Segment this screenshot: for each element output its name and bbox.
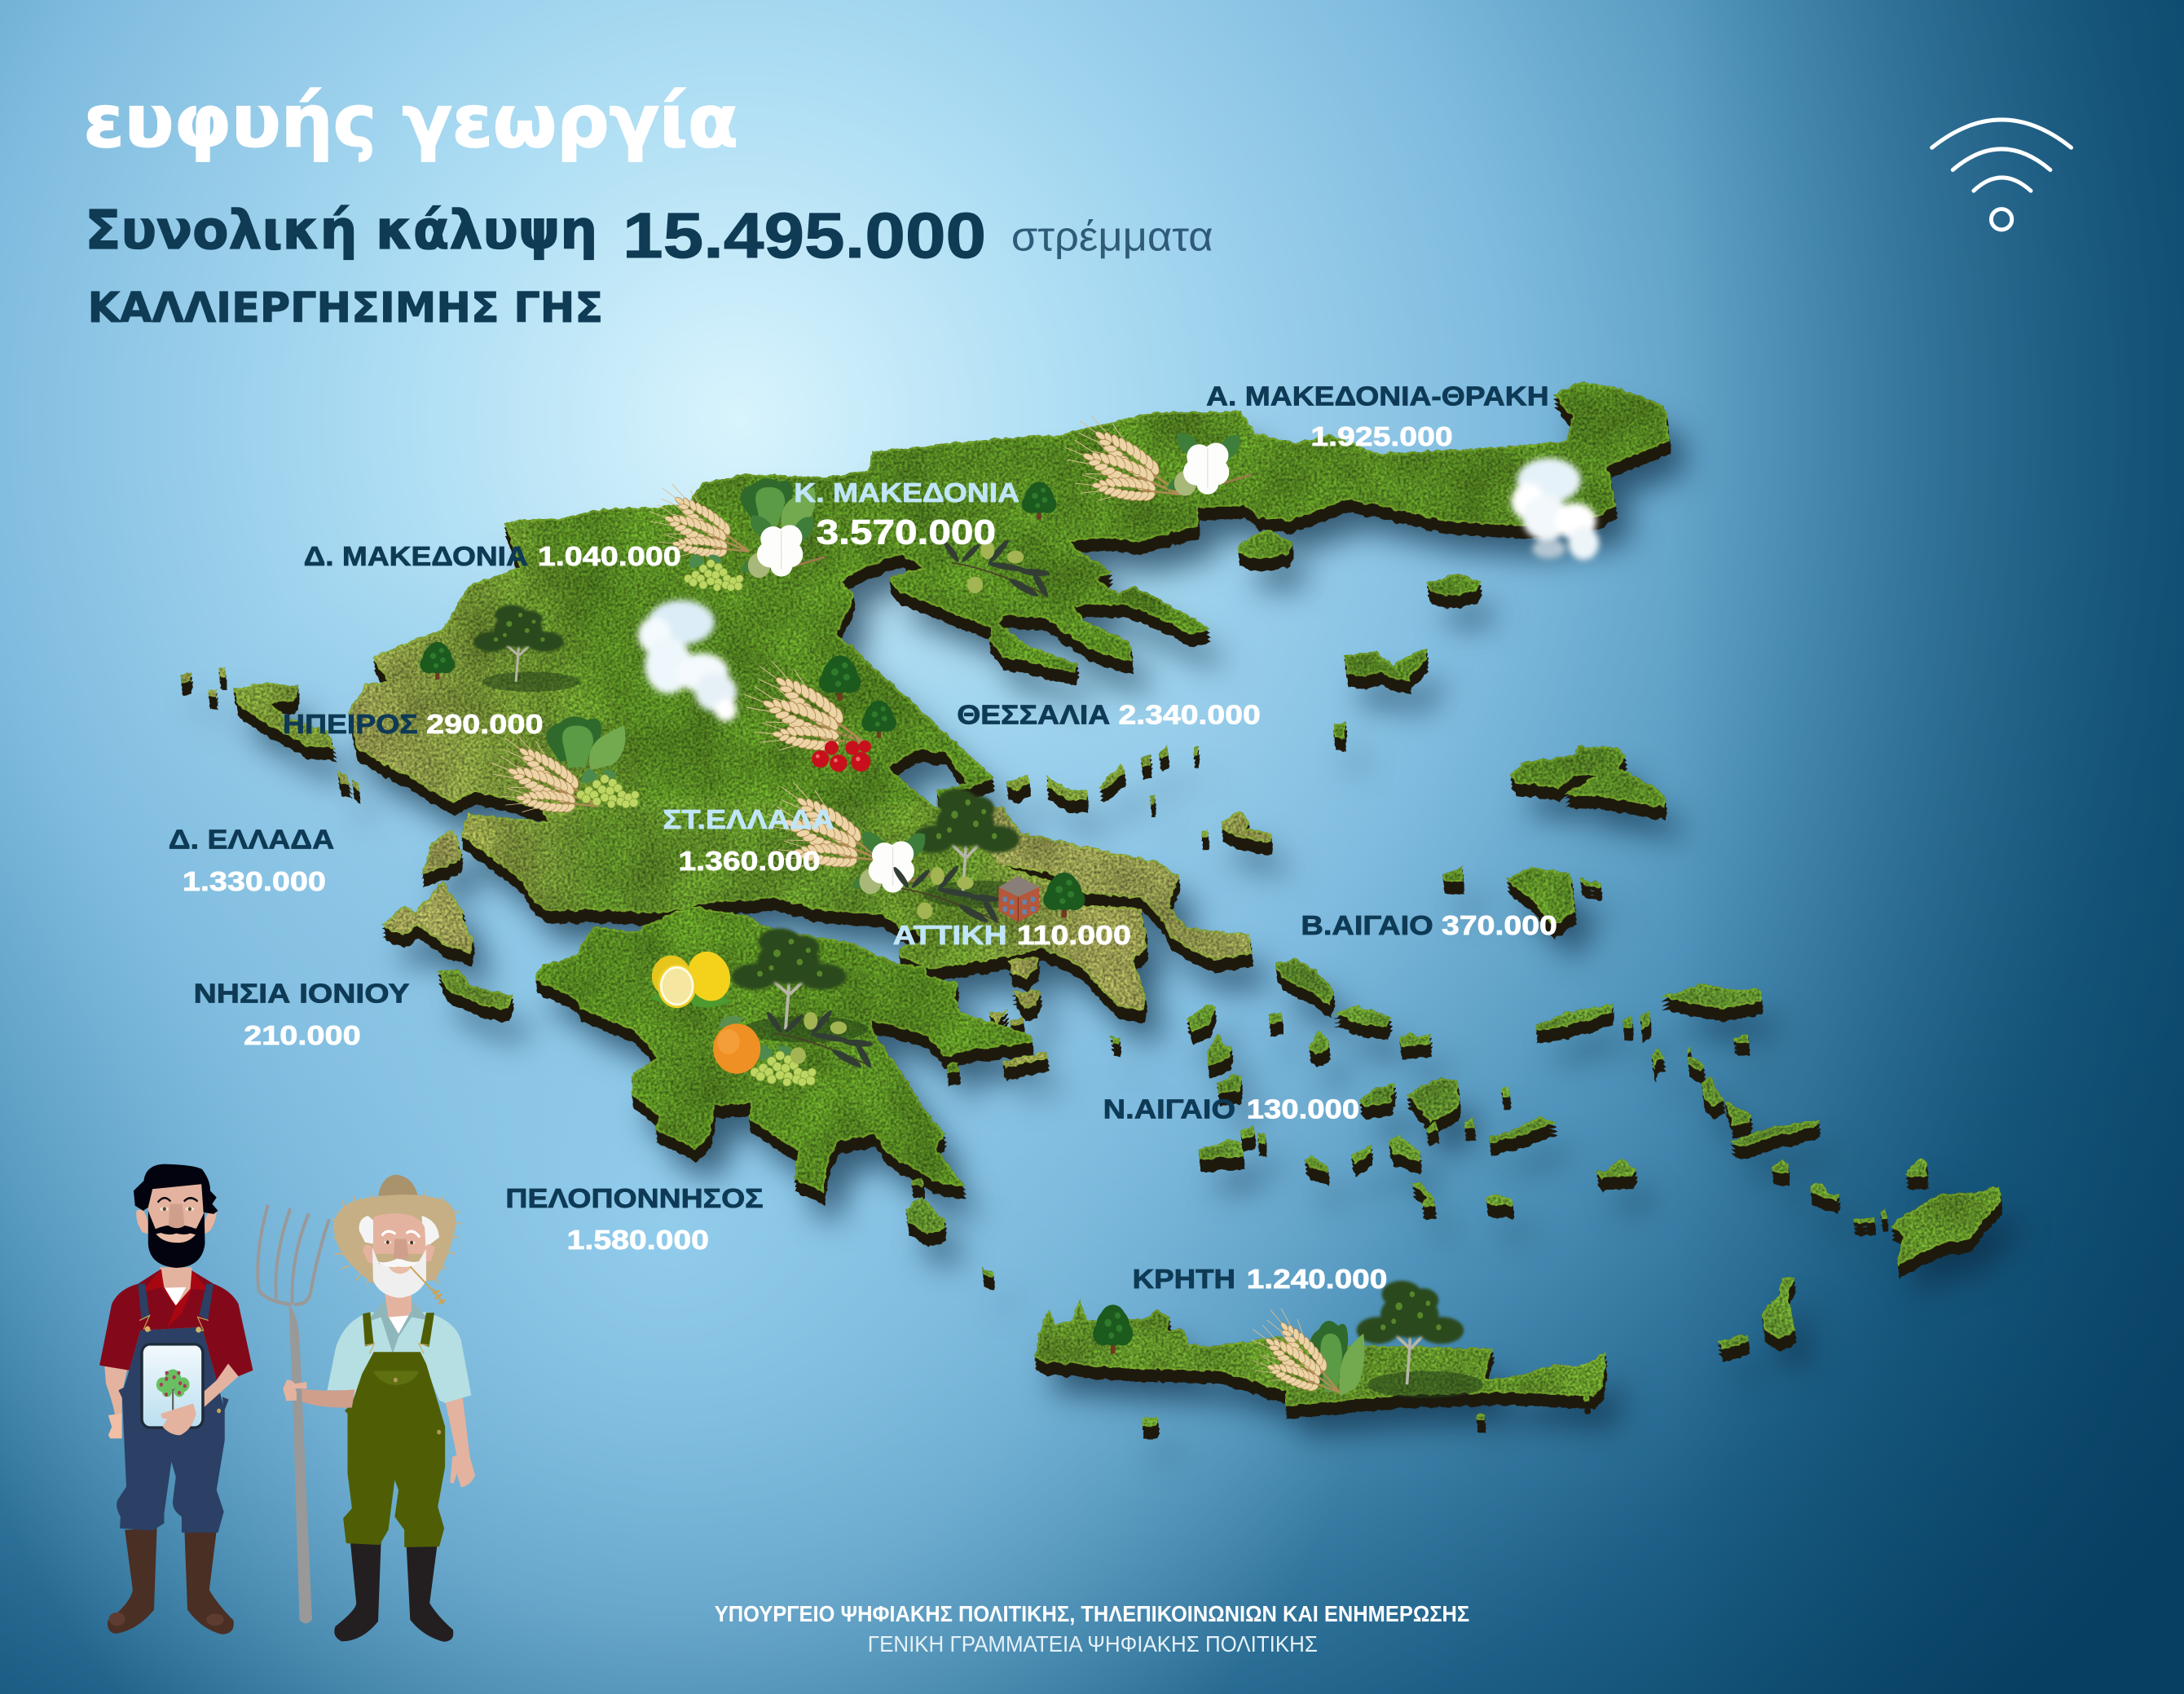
icon: wheat bundles: [486, 407, 1367, 1408]
icon: tree in Crete: [1357, 1281, 1484, 1398]
region: Peloponnese: [536, 907, 1033, 1192]
label: West Greece: 1.330.000: [183, 867, 326, 897]
label: West Greece: [169, 825, 334, 897]
label: Epirus: 290.000: [426, 710, 544, 740]
islands: North Aegean: [1238, 529, 1667, 927]
pitchfork: [258, 1207, 328, 1623]
label: Attica: 110.000: [1017, 921, 1131, 951]
label: Epirus: ΗΠΕΙΡΟΣ: [283, 710, 418, 740]
icon: tree in Peloponnese: [732, 928, 868, 1042]
subheading: ΚΑΛΛΙΕΡΓΗΣΙΜΗΣ ΓΗΣ: [88, 284, 603, 332]
label: Attica: [893, 921, 1131, 951]
label: Thessaly: [957, 701, 1261, 731]
label: East Macedonia-Thrace: 1.925.000: [1310, 422, 1453, 452]
label: Peloponnese: 1.580.000: [567, 1225, 709, 1256]
label: North Aegean: Β.ΑΙΓΑΙΟ: [1301, 911, 1433, 941]
label: Central Macedonia: [794, 478, 1019, 552]
label: South Aegean: Ν.ΑΙΓΑΙΟ: [1103, 1094, 1235, 1124]
label: Central Greece: [663, 805, 834, 877]
label: Central Greece: ΣΤ.ΕΛΛΑΔΑ: [663, 805, 834, 835]
label: Thessaly: 2.340.000: [1118, 701, 1261, 731]
region: central Greece: [461, 797, 1003, 933]
label: Central Macedonia: Κ. ΜΑΚΕΔΟΝΙΑ: [794, 478, 1019, 508]
islands: Sporades and Skyros: [1007, 745, 1270, 843]
icon: grapes: [576, 553, 817, 1086]
region: northern mainland: [348, 381, 1670, 835]
label: North Aegean: 370.000: [1442, 911, 1557, 941]
icon: olive branches: [764, 538, 1050, 1070]
icon: wifi: [1932, 120, 2072, 230]
label: North Aegean: [1301, 911, 1557, 941]
label: Thessaly: ΘΕΣΣΑΛΙΑ: [957, 701, 1110, 731]
label: Crete: ΚΡΗΤΗ: [1133, 1265, 1235, 1295]
farmers illustration: [99, 1164, 475, 1642]
icon: cloud over Thrace: [1511, 458, 1599, 560]
label: Central Macedonia: 3.570.000: [817, 513, 996, 552]
label: West Macedonia: 1.040.000: [538, 542, 681, 572]
label: West Macedonia: Δ. ΜΑΚΕΔΟΝΙΑ: [304, 542, 528, 572]
label: West Macedonia: [304, 542, 681, 572]
heading: total coverage: στρέμματα: [1011, 213, 1213, 260]
islands: Cyclades and Dodecanese: [905, 958, 2001, 1426]
region: Boeotia and Attica: [864, 799, 1147, 1011]
icon: lettuce: [546, 478, 1364, 1396]
title: ευφυής γεωργία: [84, 79, 738, 163]
label: Crete: 1.240.000: [1247, 1265, 1387, 1295]
label: Central Greece: 1.360.000: [678, 847, 821, 877]
icon: orange: [713, 1016, 760, 1074]
icon: tree in Epirus: [473, 605, 580, 692]
label: Epirus: [283, 710, 544, 740]
region: Crete: [1035, 1300, 1606, 1406]
label: South Aegean: 130.000: [1247, 1094, 1359, 1124]
footer: general secretariat: ΓΕΝΙΚΗ ΓΡΑΜΜΑΤΕΙΑ ΨΗΦΙΑΚΗΣ ΠΟΛΙΤΙΚΗΣ: [868, 1631, 1318, 1657]
label: Attica: ΑΤΤΙΚΗ: [893, 921, 1007, 951]
label: Ionian Islands: 210.000: [244, 1021, 361, 1051]
label: Peloponnese: ΠΕΛΟΠΟΝΝΗΣΟΣ: [505, 1184, 764, 1214]
label: South Aegean: [1103, 1094, 1359, 1124]
label: East Macedonia-Thrace: [1206, 381, 1549, 452]
icon: tree in central Greece: [913, 789, 1039, 909]
map of Greece: [181, 381, 2001, 1426]
label: Ionian Islands: [194, 979, 409, 1051]
label: East Macedonia-Thrace: Α. ΜΑΚΕΔΟΝΙΑ-ΘΡΑΚΗ: [1206, 381, 1549, 411]
icon: cloud over Thessaly: [638, 601, 737, 721]
farmer with straw hat: [283, 1175, 475, 1642]
icon: small trees: [420, 482, 1133, 1353]
icon: lemons: [650, 946, 737, 1007]
heading: total coverage: [85, 199, 1213, 271]
footer: ministry: ΥΠΟΥΡΓΕΙΟ ΨΗΦΙΑΚΗΣ ΠΟΛΙΤΙΚΗΣ, ΤΗΛΕΠΙΚΟΙΝΩΝΙΩΝ ΚΑΙ ΕΝΗΜΕΡΩΣΗΣ: [715, 1601, 1469, 1626]
heading: total coverage: 15.495.000: [623, 200, 986, 271]
label: Ionian Islands: ΝΗΣΙΑ ΙΟΝΙΟΥ: [194, 979, 409, 1010]
farmer with tablet: [99, 1164, 253, 1635]
icon: cherries: [812, 733, 871, 772]
island: Evia: [958, 801, 1253, 961]
label: West Greece: Δ. ΕΛΛΑΔΑ: [169, 825, 334, 856]
icon: building: [998, 876, 1039, 922]
label: Crete: [1133, 1265, 1387, 1295]
label: Peloponnese: [505, 1184, 764, 1256]
heading: total coverage: Συνολική κάλυψη: [85, 199, 597, 262]
islands: Ionian: [181, 668, 513, 1010]
islands: Saronic and Argolic: [946, 957, 1049, 1074]
icon: cotton: [741, 433, 1251, 894]
